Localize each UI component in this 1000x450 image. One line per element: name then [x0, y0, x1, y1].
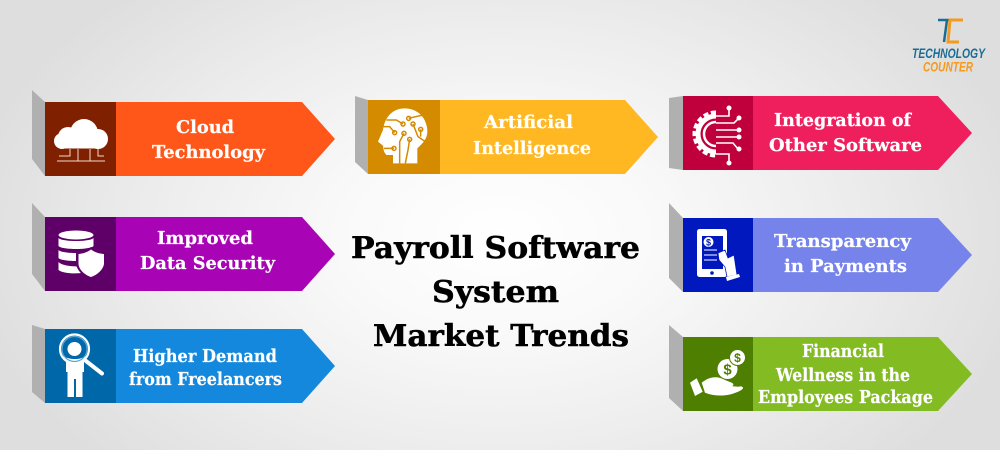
icon: gear with circuit — [695, 106, 742, 166]
label: Higher Demand from Freelancers — [129, 346, 282, 390]
label: Artificial Intelligence: Intelligence — [473, 138, 591, 159]
label: Integration of Other Software — [769, 110, 922, 156]
label: Integration of Other Software: Other Software — [769, 135, 922, 156]
panel: Integration of Other Software — [669, 96, 972, 170]
panel: Artificial Intelligence — [355, 96, 658, 174]
label: Artificial Intelligence: Artificial — [483, 112, 573, 133]
label: Cloud Technology — [152, 117, 266, 163]
panel: Higher Demand from Freelancers — [32, 325, 335, 403]
label: Financial Wellness in the Employees Package: Employees Package — [758, 387, 933, 408]
label: Improved Data Security: Data Security — [140, 253, 276, 274]
panel: Improved Data Security — [32, 203, 335, 291]
icon: AI head — [378, 108, 427, 163]
label: Artificial Intelligence — [473, 112, 591, 159]
title: Market Trends — [373, 319, 629, 354]
icon: tablet payment — [697, 229, 740, 281]
label: Higher Demand from Freelancers: Higher Demand — [133, 346, 277, 367]
title: Payroll Software — [351, 231, 640, 266]
label: Financial Wellness in the Employees Package: Wellness in the — [775, 365, 910, 386]
icon: hand with coins: $ — [723, 362, 732, 378]
label: Transparency in Payments: in Payments — [784, 256, 907, 277]
label: Cloud Technology: Cloud — [176, 117, 234, 138]
icon: database and shield — [58, 230, 106, 279]
panel: Transparency in Payments — [669, 203, 972, 292]
label: Transparency in Payments: Transparency — [774, 231, 912, 252]
logo: Technology Counter — [912, 20, 986, 74]
icon: hand with coins: $ — [734, 351, 741, 365]
logo: Technology Counter: COUNTER — [923, 58, 974, 74]
label: Integration of Other Software: Integration of — [774, 110, 912, 131]
label: Improved Data Security: Improved — [157, 228, 253, 249]
panel: Financial Wellness in the Employees Package — [669, 325, 972, 411]
label: Financial Wellness in the Employees Package: Financial — [802, 341, 884, 362]
label: Cloud Technology: Technology — [152, 142, 266, 163]
icon: hand with coins — [690, 350, 746, 396]
title — [351, 231, 640, 354]
label: Financial Wellness in the Employees Package — [758, 341, 933, 408]
label: Transparency in Payments — [774, 231, 912, 277]
icon: cloud — [54, 119, 108, 161]
icon: person with magnifier — [60, 334, 102, 397]
panel: Cloud Technology — [32, 90, 335, 176]
icon: tablet payment: $ — [706, 238, 711, 248]
title: System — [432, 275, 559, 310]
label: Improved Data Security — [140, 228, 276, 274]
label: Higher Demand from Freelancers: from Freelancers — [129, 369, 282, 390]
